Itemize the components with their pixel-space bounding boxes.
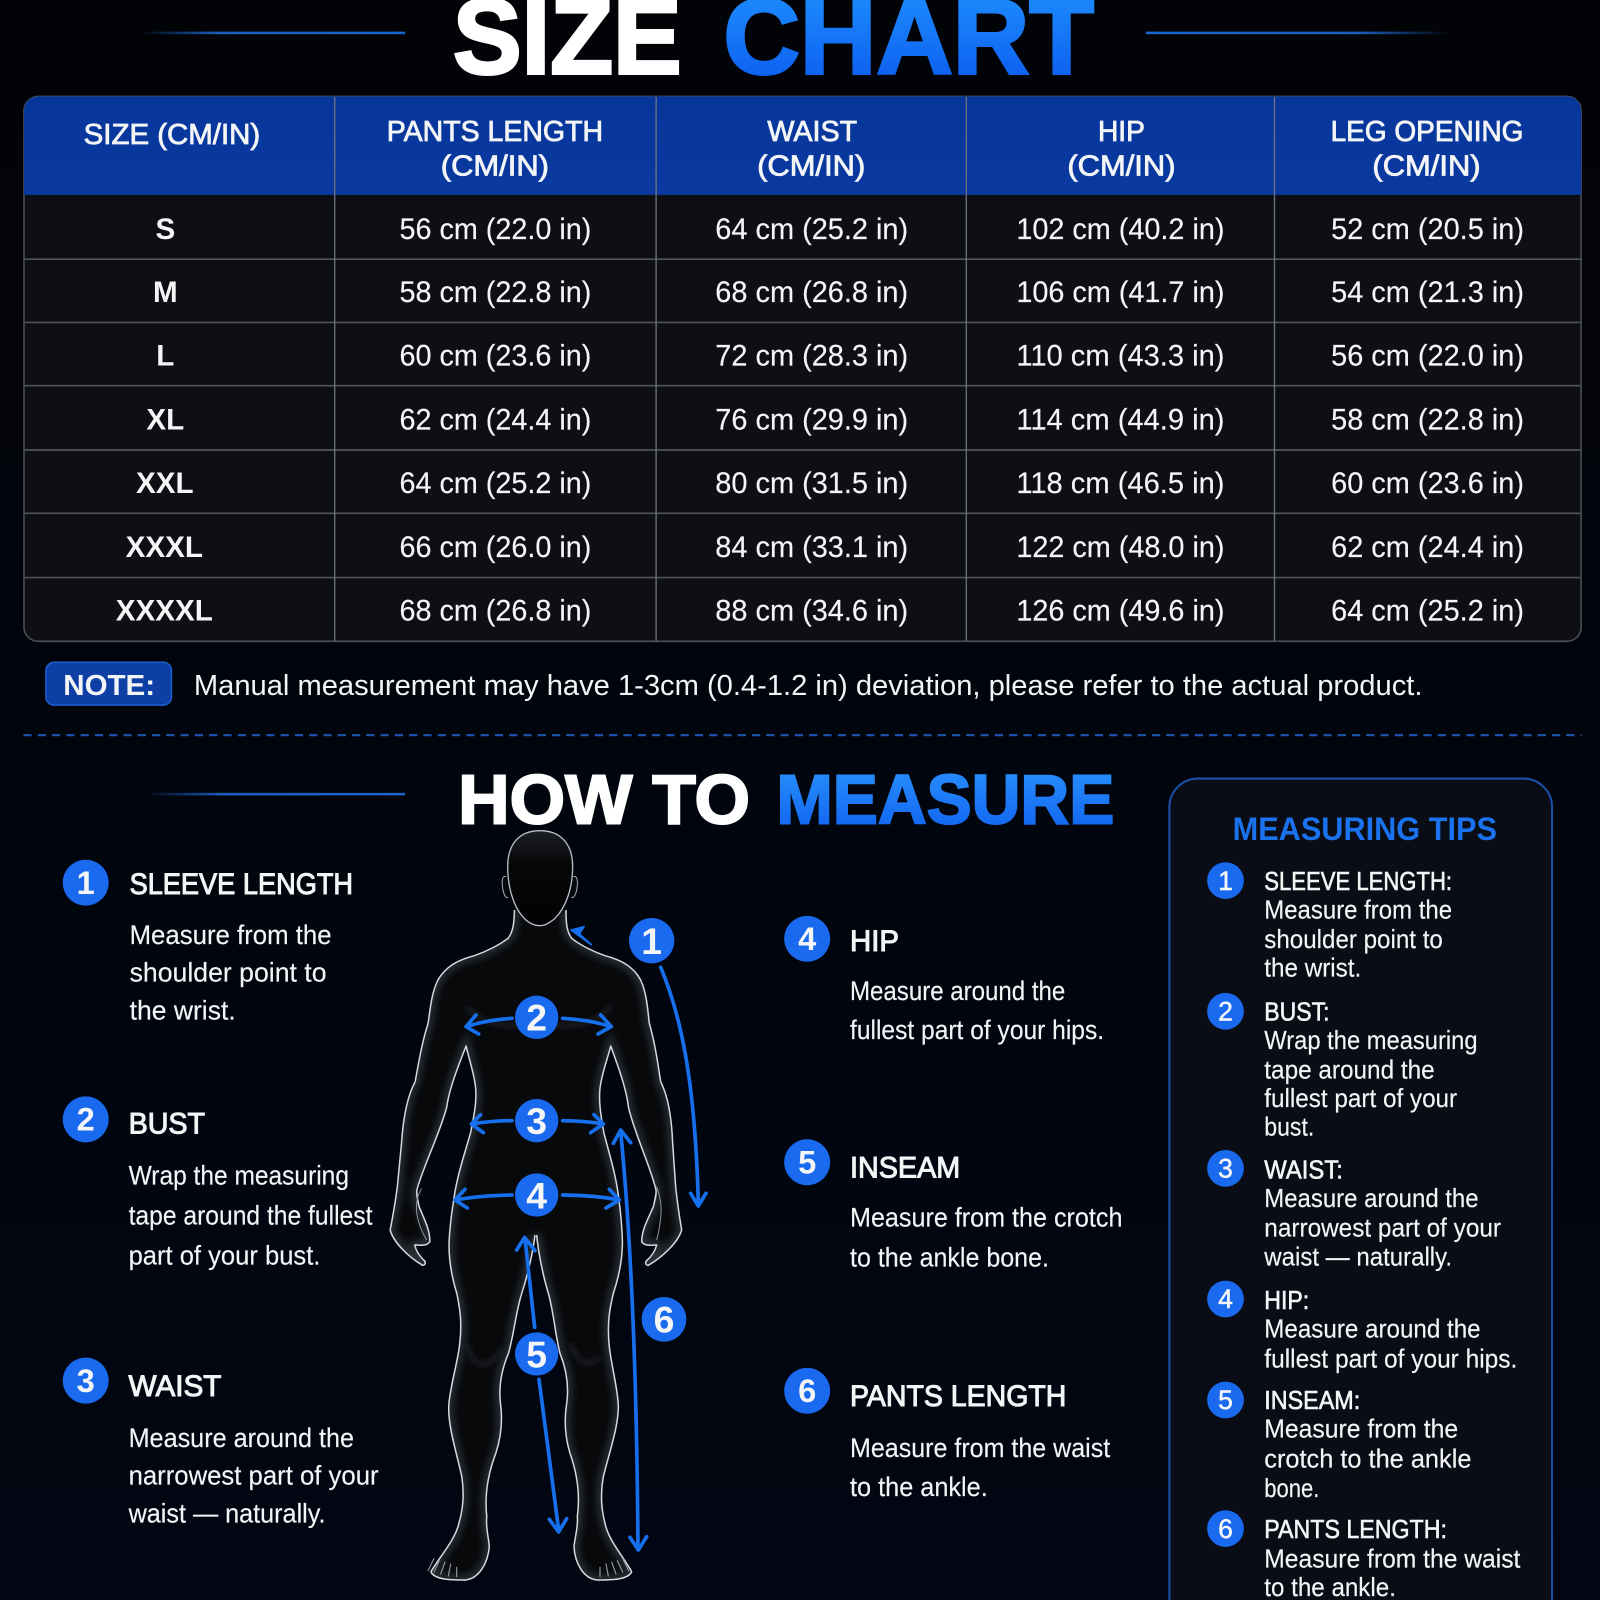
arrow 2: bust <box>466 1015 611 1034</box>
table header: (CM/IN) <box>441 151 549 183</box>
table header: WAIST <box>767 116 857 148</box>
step: inseam: Measure from the crotch <box>850 1203 1122 1233</box>
row S <box>155 213 1524 246</box>
arrow 5: inseam <box>517 1237 567 1532</box>
badge 2 <box>515 996 558 1039</box>
badge 6: 6 <box>654 1299 674 1341</box>
row XXL: XXL <box>136 467 194 500</box>
body figure with measurement arrows <box>381 831 706 1580</box>
tip 2 <box>1207 993 1478 1142</box>
step: bust: part of your bust. <box>129 1240 320 1270</box>
badge 5 <box>515 1332 558 1376</box>
badge 3 <box>515 1099 558 1142</box>
tip 5: 5 <box>1218 1385 1233 1415</box>
row L: L <box>156 339 174 372</box>
step: bust: BUST <box>129 1108 205 1141</box>
row L: 60 cm (23.6 in) <box>399 339 591 372</box>
row M: 58 cm (22.8 in) <box>399 276 591 309</box>
step: bust: 2 <box>77 1101 95 1138</box>
row M: 54 cm (21.3 in) <box>1331 276 1524 309</box>
step: hip: fullest part of your hips. <box>850 1015 1104 1045</box>
tip 3: WAIST: <box>1264 1157 1343 1185</box>
tip 6: 6 <box>1218 1514 1233 1544</box>
tip 1: SLEEVE LENGTH: <box>1264 868 1452 896</box>
tip 3: narrowest part of your <box>1264 1215 1502 1243</box>
table header: LEG OPENING <box>1331 116 1523 148</box>
step: inseam: 5 <box>798 1143 816 1180</box>
step: waist: narrowest part of your <box>129 1461 379 1491</box>
figure silhouette <box>381 831 682 1580</box>
row XXXXL: 126 cm (49.6 in) <box>1016 594 1224 627</box>
row S: 56 cm (22.0 in) <box>399 213 591 246</box>
row XXXXL: 88 cm (34.6 in) <box>715 594 908 627</box>
step: bust <box>63 1096 373 1270</box>
step: pants length: PANTS LENGTH <box>850 1380 1066 1413</box>
note <box>46 662 1422 705</box>
badge 1 <box>629 918 674 963</box>
row XL: 58 cm (22.8 in) <box>1331 404 1524 437</box>
badge 2: 2 <box>526 997 547 1039</box>
row XXL: 64 cm (25.2 in) <box>399 467 591 500</box>
tip 2: tape around the <box>1264 1057 1435 1085</box>
step: inseam <box>784 1139 1122 1272</box>
table header: HIP <box>1098 116 1145 148</box>
tip 5: crotch to the ankle <box>1264 1445 1471 1473</box>
badge 5: 5 <box>526 1333 547 1375</box>
table header: (CM/IN) <box>1067 151 1176 183</box>
tip 1: 1 <box>1218 866 1233 896</box>
table header: (CM/IN) <box>757 151 865 183</box>
badge 1: 1 <box>641 920 662 962</box>
step: bust: tape around the fullest <box>129 1200 373 1230</box>
step: sleeve length: the wrist. <box>130 995 236 1025</box>
heading: how to measure <box>145 760 1114 838</box>
row L: 110 cm (43.3 in) <box>1016 339 1224 372</box>
row XXXL: XXXL <box>126 531 203 564</box>
note: NOTE: <box>63 670 155 702</box>
badge 4 <box>515 1173 558 1217</box>
step: waist: Measure around the <box>129 1423 354 1453</box>
tip 2: bust. <box>1264 1114 1314 1142</box>
badge 6 <box>642 1297 686 1342</box>
row XXL: 118 cm (46.5 in) <box>1016 467 1224 500</box>
step: pants length: Measure from the waist <box>850 1433 1111 1463</box>
row XL: 114 cm (44.9 in) <box>1016 404 1224 437</box>
heading: how to measure: MEASURE <box>777 760 1114 838</box>
tip 3 <box>1207 1150 1502 1271</box>
tip 3: 3 <box>1218 1154 1233 1184</box>
tip 3: Measure around the <box>1264 1185 1479 1213</box>
row XXL: 80 cm (31.5 in) <box>715 467 908 500</box>
tip 5 <box>1207 1382 1471 1503</box>
row S: 52 cm (20.5 in) <box>1331 213 1524 246</box>
tip 1: Measure from the <box>1264 896 1452 924</box>
row XXXL <box>126 531 1524 564</box>
step: waist: WAIST <box>129 1370 221 1403</box>
row XL <box>146 404 1524 437</box>
tip 4: 4 <box>1218 1284 1233 1314</box>
heading: how to measure: HOW TO <box>458 760 750 838</box>
step: sleeve length: shoulder point to <box>130 958 327 988</box>
row XL: 62 cm (24.4 in) <box>399 404 591 437</box>
step: pants length: 6 <box>798 1372 816 1409</box>
tip 4: fullest part of your hips. <box>1264 1345 1517 1373</box>
row S: S <box>155 213 175 246</box>
step: sleeve length: SLEEVE LENGTH <box>130 868 353 901</box>
row S: 102 cm (40.2 in) <box>1016 213 1224 246</box>
row XXXXL <box>116 594 1524 627</box>
heading: size chart <box>140 0 1450 96</box>
tip 5: Measure from the <box>1264 1416 1458 1444</box>
row XXL <box>136 467 1524 500</box>
row L <box>156 339 1524 372</box>
row XL: XL <box>146 404 184 437</box>
note: Manual measurement may have 1-3cm (0.4-1.2 in) deviation, please refer to the actual product. <box>194 670 1422 702</box>
panel: measuring tips <box>1169 779 1552 1600</box>
step: hip: Measure around the <box>850 976 1065 1006</box>
step: sleeve length: 1 <box>77 864 95 901</box>
row S: 64 cm (25.2 in) <box>715 213 908 246</box>
tip 6 <box>1207 1510 1520 1600</box>
tip 2: fullest part of your <box>1264 1085 1458 1113</box>
row M: 68 cm (26.8 in) <box>715 276 908 309</box>
row XXXL: 66 cm (26.0 in) <box>399 531 591 564</box>
step: bust: Wrap the measuring <box>129 1161 349 1191</box>
toes <box>428 1559 629 1577</box>
tip 6: PANTS LENGTH: <box>1264 1516 1447 1544</box>
step: inseam: INSEAM <box>850 1152 960 1185</box>
step: hip: 4 <box>798 920 816 957</box>
tip 5: INSEAM: <box>1264 1387 1360 1415</box>
row XXXL: 62 cm (24.4 in) <box>1331 531 1524 564</box>
tip 1: shoulder point to <box>1264 926 1443 954</box>
tip 1: the wrist. <box>1264 955 1361 983</box>
row XXXXL: 68 cm (26.8 in) <box>399 594 591 627</box>
badge 4: 4 <box>526 1174 547 1216</box>
tip 2: 2 <box>1218 996 1233 1026</box>
tip 6: Measure from the waist <box>1264 1545 1520 1573</box>
tip 3: waist — naturally. <box>1263 1243 1452 1271</box>
row M <box>153 276 1524 309</box>
table header: PANTS LENGTH <box>387 116 603 148</box>
arrow 1: sleeve length <box>571 927 706 1206</box>
table header: SIZE (CM/IN) <box>84 119 260 151</box>
tip 4: Measure around the <box>1264 1316 1481 1344</box>
step: waist: 3 <box>77 1362 95 1399</box>
row M: M <box>153 276 178 309</box>
step: sleeve length <box>63 860 353 1025</box>
table header: (CM/IN) <box>1372 151 1481 183</box>
arrow 3: waist <box>471 1115 603 1133</box>
step: pants length: to the ankle. <box>850 1472 988 1502</box>
tip 4: HIP: <box>1264 1287 1309 1315</box>
tip 2: Wrap the measuring <box>1264 1027 1478 1055</box>
step: waist: waist — naturally. <box>128 1498 326 1528</box>
row M: 106 cm (41.7 in) <box>1016 276 1224 309</box>
arrow 4: hip <box>455 1189 619 1208</box>
row XXL: 60 cm (23.6 in) <box>1331 467 1524 500</box>
tip 1 <box>1207 862 1452 983</box>
step: waist <box>63 1358 379 1528</box>
row XXXL: 122 cm (48.0 in) <box>1016 531 1224 564</box>
tip 2: BUST: <box>1264 998 1330 1026</box>
step: hip <box>784 916 1104 1045</box>
tip 5: bone. <box>1264 1475 1319 1503</box>
step: hip: HIP <box>850 925 899 958</box>
step: sleeve length: Measure from the <box>130 920 332 950</box>
row XXXXL: 64 cm (25.2 in) <box>1331 594 1524 627</box>
row L: 72 cm (28.3 in) <box>715 339 908 372</box>
badge 3: 3 <box>526 1100 547 1142</box>
row XXXL: 84 cm (33.1 in) <box>715 531 908 564</box>
row L: 56 cm (22.0 in) <box>1331 339 1524 372</box>
row XL: 76 cm (29.9 in) <box>715 404 908 437</box>
table header <box>84 116 1523 183</box>
tips title: MEASURING TIPS <box>1233 810 1497 847</box>
step: inseam: to the ankle bone. <box>850 1242 1049 1272</box>
size table <box>24 96 1581 641</box>
arrow 6: pants length <box>613 1130 647 1550</box>
row XXXXL: XXXXL <box>116 594 213 627</box>
tip 4 <box>1207 1281 1517 1373</box>
step: pants length <box>784 1368 1111 1502</box>
